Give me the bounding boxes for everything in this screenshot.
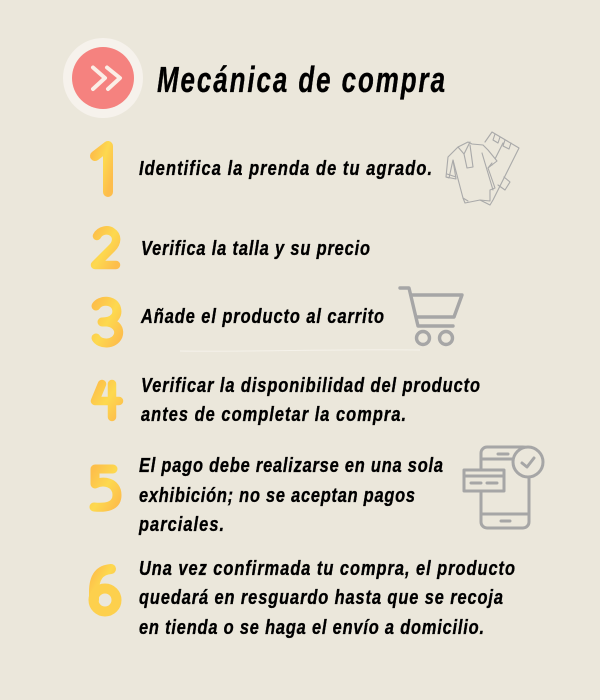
icon: double chevron badge xyxy=(63,38,143,118)
number 1 xyxy=(95,146,108,192)
number 3 xyxy=(96,301,119,343)
icon: phone payment xyxy=(464,447,543,528)
number 5 xyxy=(94,469,117,507)
shirt xyxy=(446,142,497,203)
step 4 xyxy=(95,373,480,425)
trousers xyxy=(480,132,519,205)
step 2 text: Verifica la talla y su precio xyxy=(141,236,370,259)
step 3 text: Añade el producto al carrito xyxy=(140,304,384,327)
step 5 text line 3: parciales. xyxy=(138,512,224,535)
icon: clothes xyxy=(446,132,519,205)
step 5 text line 1: El pago debe realizarse en una sola xyxy=(139,453,443,476)
number 6 xyxy=(94,569,111,600)
step 2 xyxy=(95,230,370,265)
number 6 bowl xyxy=(94,588,116,612)
step 5 text line 2: exhibición; no se aceptan pagos xyxy=(139,483,415,506)
step 1 text: Identifica la prenda de tu agrado. xyxy=(139,156,432,179)
step 4 text line 1: Verificar la disponibilidad del producto xyxy=(141,373,480,396)
step 5 xyxy=(94,453,443,535)
white hand-drawn underline xyxy=(180,350,420,351)
icon: shopping cart xyxy=(400,288,462,344)
step 1 xyxy=(95,146,432,192)
step 6 text line 2: quedará en resguardo hasta que se recoja xyxy=(139,585,503,608)
step 6 text line 1: Una vez confirmada tu compra, el producto xyxy=(139,556,515,579)
step 4 text line 2: antes de completar la compra. xyxy=(141,402,406,425)
title: Mecánica de compra xyxy=(157,60,445,100)
step 3 xyxy=(96,301,384,343)
number 4 xyxy=(95,384,119,417)
number 2 xyxy=(95,230,116,265)
step 6 xyxy=(94,556,515,638)
step 6 text line 3: en tienda o se haga el envío a domicilio. xyxy=(139,615,484,638)
